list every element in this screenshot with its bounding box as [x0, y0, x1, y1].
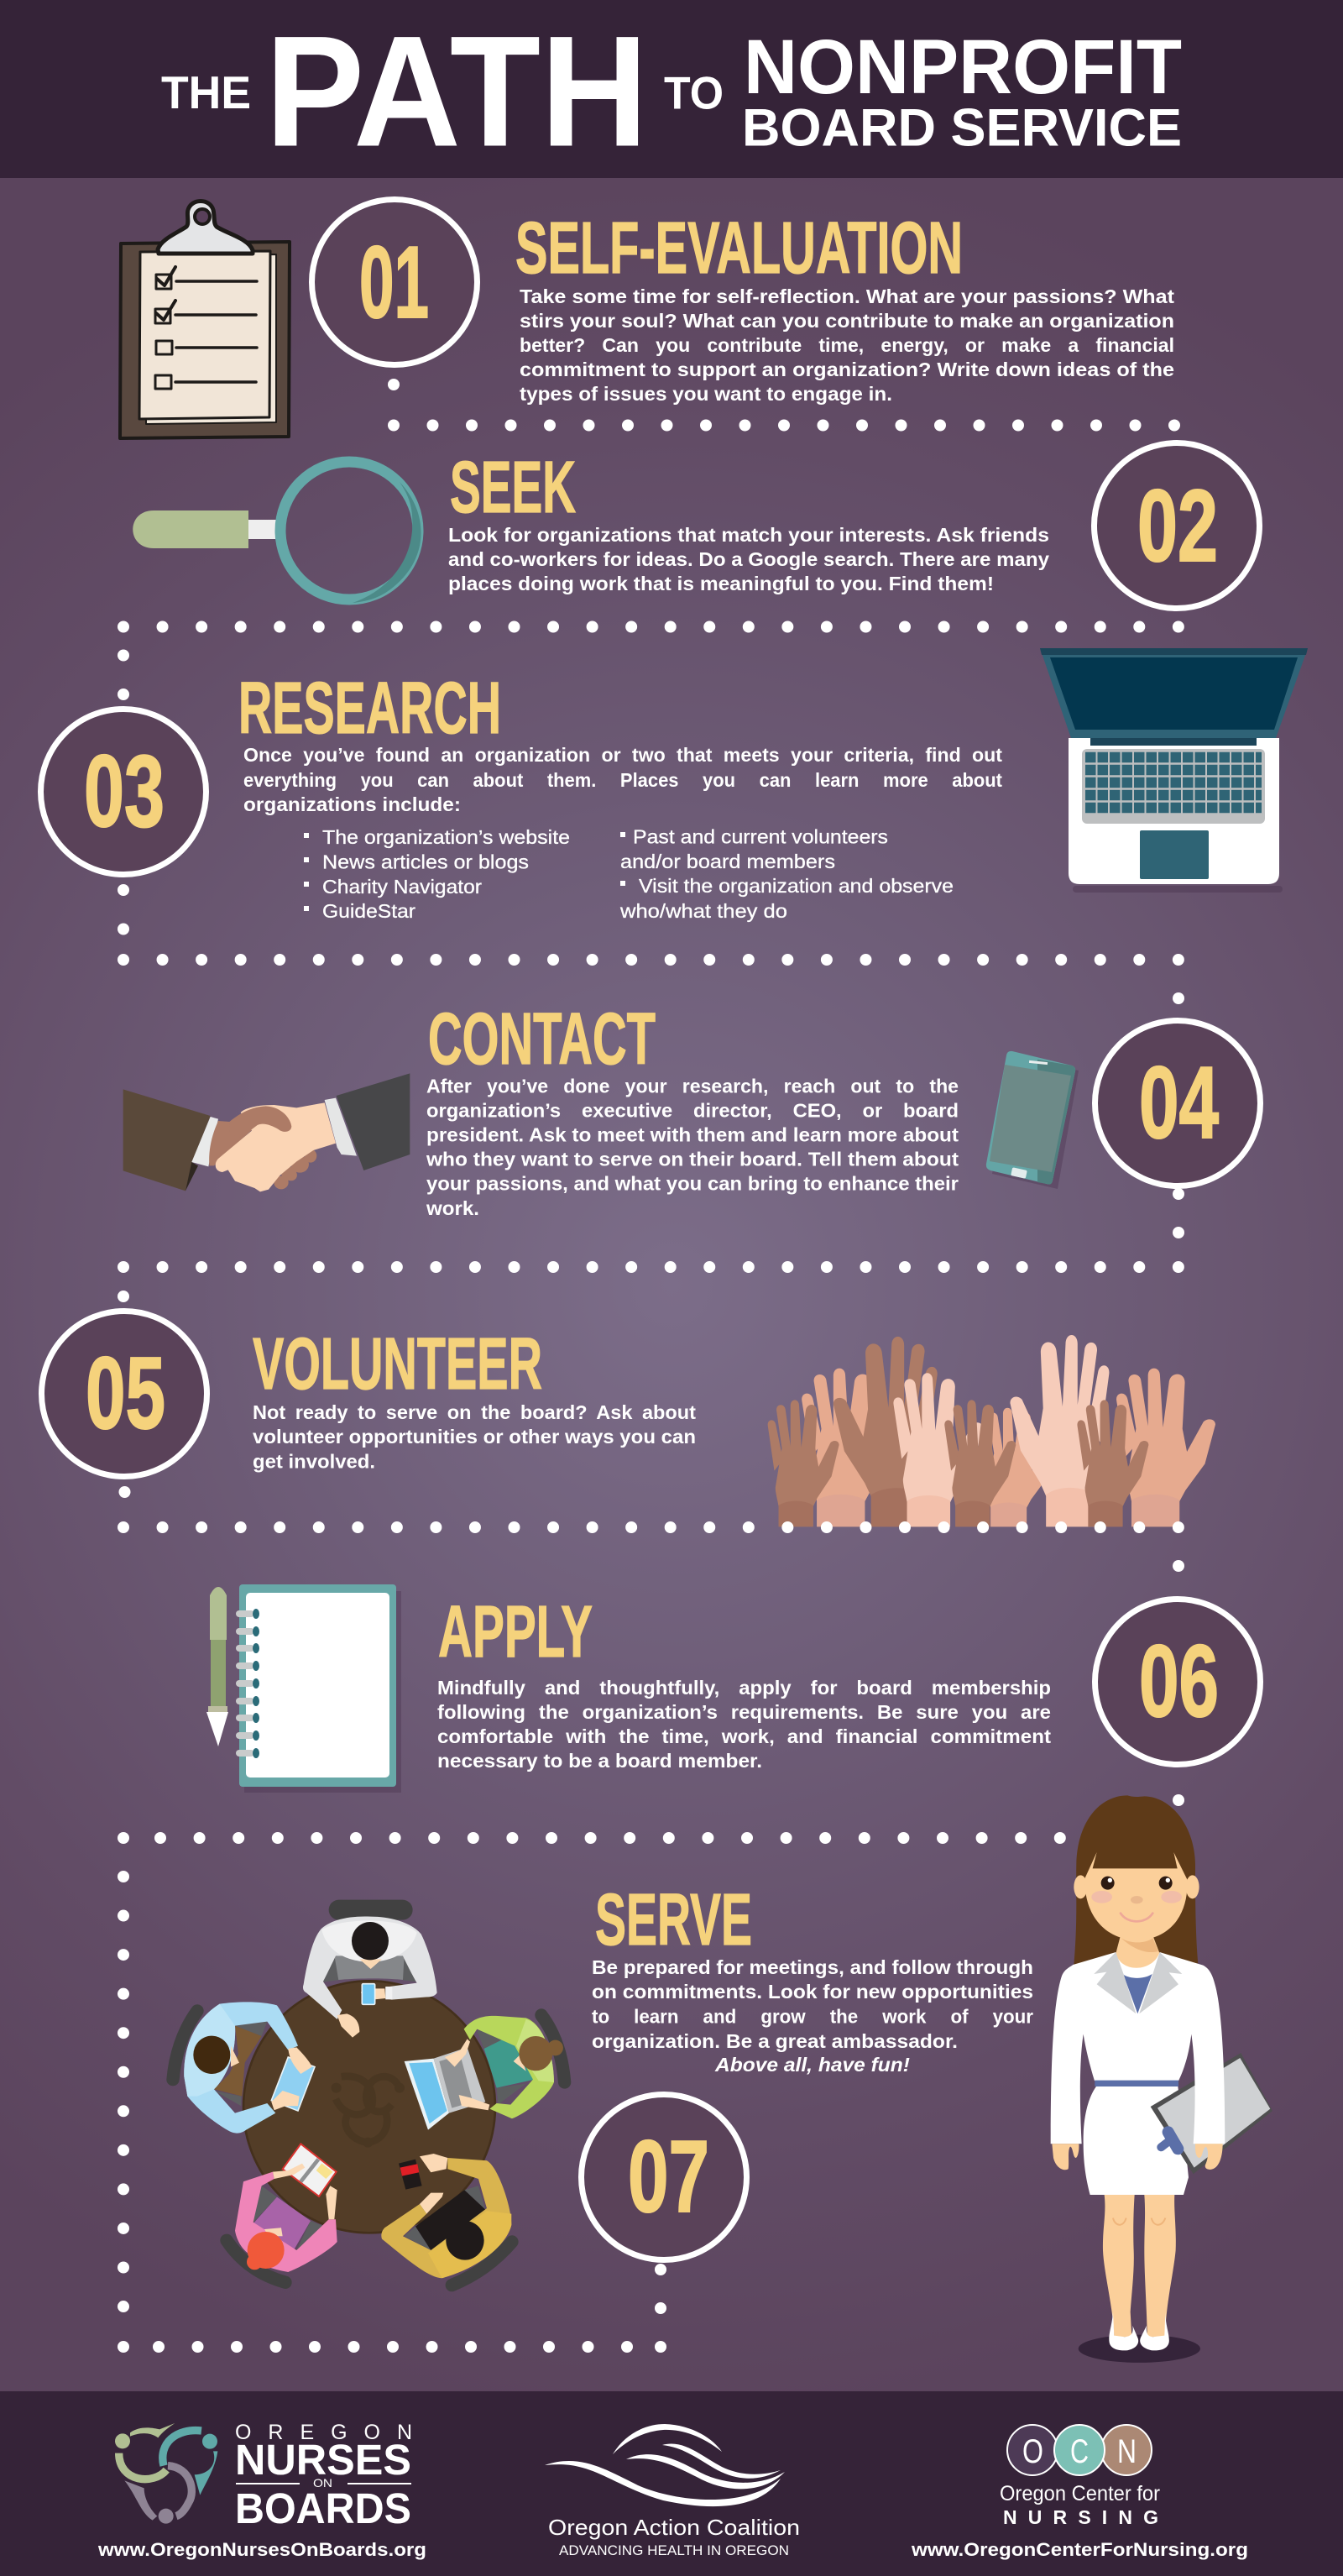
icon: phone	[986, 1051, 1079, 1189]
number 07	[581, 2094, 747, 2260]
bullet list right: Past and current volunteers	[633, 826, 888, 848]
icon: handshake	[123, 1073, 410, 1191]
panel: step 04 contact	[123, 998, 1260, 1219]
blouse and lapels	[1094, 1952, 1182, 2013]
person: yellow	[381, 2154, 512, 2285]
number 06: 06	[1139, 1624, 1219, 1738]
text block: volunteer opportunities or other ways you can	[253, 1426, 696, 1448]
text block: organization’s executive director, CEO, or board	[426, 1100, 959, 1122]
icon: raised hands	[768, 1335, 1215, 1526]
number 01: 01	[359, 225, 429, 339]
heading: APPLY	[438, 1591, 593, 1673]
table	[243, 1981, 495, 2233]
text block	[520, 285, 1174, 405]
dress skirt	[1084, 2086, 1189, 2195]
name: Oregon Center for	[1000, 2482, 1160, 2505]
text block: who they want to serve on their board. Tell them about	[426, 1149, 959, 1170]
panel: step 03 research	[40, 648, 1308, 922]
bullet list right: and/or board members	[620, 851, 835, 872]
text block: everything you can about them. Places you can learn more about	[243, 769, 1002, 791]
OCN circles	[1007, 2425, 1152, 2475]
face	[1085, 1852, 1187, 1940]
footer band	[0, 2391, 1343, 2576]
text block	[426, 1075, 959, 1219]
number 02	[1095, 443, 1259, 608]
number 01	[312, 200, 477, 364]
panel: step 05 volunteer	[42, 1312, 1215, 1527]
title: THE	[161, 66, 251, 118]
text block: Above all, have fun!	[714, 2054, 910, 2076]
person: green	[405, 2015, 565, 2130]
tagline: ADVANCING HEALTH IN OREGON	[559, 2542, 789, 2558]
text block: stirs your soul? What can you contribute to make an organization	[520, 310, 1174, 332]
wordmark	[235, 2421, 412, 2532]
person: pink	[227, 2144, 337, 2282]
dotted row below hands	[123, 1521, 1178, 1533]
number 03	[40, 709, 206, 875]
text block: necessary to be a board member.	[437, 1750, 762, 1772]
text block: comfortable with the time, work, and financial commitment	[437, 1725, 1051, 1747]
panel: step 07 serve	[173, 1795, 1272, 2363]
text block: and co-workers for ideas. Do a Google search. There are many	[448, 548, 1049, 570]
text block: better? Can you contribute time, energy, or make a financial	[520, 334, 1174, 356]
bullet list left: GuideStar	[322, 900, 415, 922]
heading: VOLUNTEER	[253, 1323, 542, 1405]
shoes	[1109, 2312, 1169, 2350]
logo: Oregon Action Coalition	[545, 2424, 800, 2558]
bullet list left	[304, 826, 570, 922]
OCN letters: C	[1070, 2433, 1089, 2470]
coat	[1051, 1952, 1225, 2144]
logo: Oregon Nurses on Boards	[97, 2421, 426, 2560]
OCN letters	[1022, 2433, 1137, 2470]
text block: Not ready to serve on the board? Ask about	[253, 1401, 696, 1423]
OCN letters: O	[1022, 2433, 1043, 2470]
title: BOARD SERVICE	[742, 99, 1182, 158]
belt	[1095, 2081, 1178, 2086]
heading: SERVE	[595, 1879, 752, 1961]
heading: SEEK	[450, 447, 576, 528]
text block: Mindfully and thoughtfully, apply for board membership	[437, 1677, 1051, 1699]
text block: get involved.	[253, 1451, 375, 1473]
person: blue	[173, 2002, 315, 2134]
nursing: NURSING	[1003, 2506, 1158, 2528]
title: TO	[664, 67, 724, 119]
name: Oregon Action Coalition	[548, 2515, 800, 2540]
text block: types of issues you want to engage in.	[520, 383, 892, 405]
bullet list left: The organization’s website	[322, 826, 570, 848]
text block: Look for organizations that match your interests. Ask friends	[448, 524, 1049, 546]
title: NONPROFIT	[744, 24, 1182, 110]
text block: Once you’ve found an organization or two that meets your criteria, find out	[243, 744, 1002, 766]
text block: to learn and grow the work of your	[592, 2005, 1033, 2027]
title	[161, 3, 1182, 180]
text block: president. Ask to meet with them and learn more about	[426, 1123, 959, 1145]
illustration: woman with clipboard	[1051, 1795, 1272, 2363]
heading: CONTACT	[428, 998, 656, 1080]
number 04	[1095, 1021, 1261, 1186]
icon: notebook and pen	[206, 1584, 401, 1793]
logo: Oregon Center for Nursing	[911, 2425, 1248, 2560]
text block: on commitments. Look for new opportunities	[592, 1981, 1033, 2003]
text block: Take some time for self-reflection. What are your passions? What	[520, 285, 1174, 307]
neck and ears	[1074, 1875, 1199, 1979]
icon: magnifying glass	[133, 462, 421, 603]
number 07: 07	[628, 2119, 709, 2233]
title: PATH	[265, 3, 648, 180]
bullet list right: who/what they do	[619, 900, 787, 922]
number 06	[1095, 1599, 1261, 1765]
number 03: 03	[84, 734, 165, 848]
text block: work.	[426, 1197, 479, 1219]
number 04: 04	[1139, 1045, 1219, 1160]
text block	[448, 524, 1049, 594]
text block	[243, 744, 1002, 815]
number 05	[42, 1312, 206, 1476]
icon: laptop	[1040, 648, 1308, 893]
header band	[0, 0, 1343, 180]
OCN letters: N	[1117, 2433, 1137, 2470]
url: www.OregonNursesOnBoards.org	[97, 2539, 426, 2560]
logo mark	[115, 2423, 217, 2524]
knees	[1113, 2218, 1165, 2225]
panel: step 02 seek	[133, 443, 1259, 608]
hands	[1052, 2144, 1223, 2170]
bullet list right: Visit the organization and observe	[639, 875, 954, 897]
text block: organizations include:	[243, 793, 461, 815]
person: top	[303, 1900, 437, 2038]
text block: commitment to support an organization? Write down ideas of the	[520, 359, 1174, 380]
bullet list left: Charity Navigator	[322, 876, 482, 898]
panel: step 01 self-evaluation	[120, 200, 1174, 438]
text block	[253, 1401, 696, 1473]
text block: After you’ve done your research, reach out to the	[426, 1075, 959, 1097]
heading: SELF-EVALUATION	[515, 207, 963, 289]
wordmark: ON	[313, 2476, 332, 2490]
text block: organization. Be a great ambassador.	[592, 2030, 958, 2052]
wave mark	[545, 2424, 785, 2506]
wordmark: BOARDS	[235, 2484, 411, 2532]
heading: RESEARCH	[238, 668, 501, 749]
text block: following the organization’s requirements. Be sure you are	[437, 1701, 1051, 1723]
dotted path connecting the steps	[123, 385, 1178, 2347]
hair	[1074, 1795, 1198, 1965]
text block	[437, 1677, 1051, 1772]
number 05: 05	[86, 1336, 165, 1450]
number 02: 02	[1137, 469, 1218, 583]
wordmark: OREGON	[235, 2421, 412, 2444]
icon: clipboard	[120, 202, 290, 438]
floor shadow	[1079, 2335, 1200, 2363]
wordmark: NURSES	[235, 2436, 411, 2484]
bullet list right	[619, 826, 954, 922]
clipboard held	[1151, 2053, 1272, 2174]
url: www.OregonCenterForNursing.org	[911, 2539, 1248, 2560]
bullet list left: News articles or blogs	[322, 851, 529, 873]
text block	[592, 1956, 1033, 2076]
illustration: people around a table	[173, 1900, 565, 2285]
text block: your passions, and what you can bring to enhance their	[426, 1172, 959, 1194]
panel: step 06 apply	[206, 1584, 1261, 1793]
legs	[1103, 2195, 1176, 2337]
text block: Be prepared for meetings, and follow through	[592, 1956, 1033, 1978]
text block: places doing work that is meaningful to you. Find them!	[448, 573, 994, 594]
